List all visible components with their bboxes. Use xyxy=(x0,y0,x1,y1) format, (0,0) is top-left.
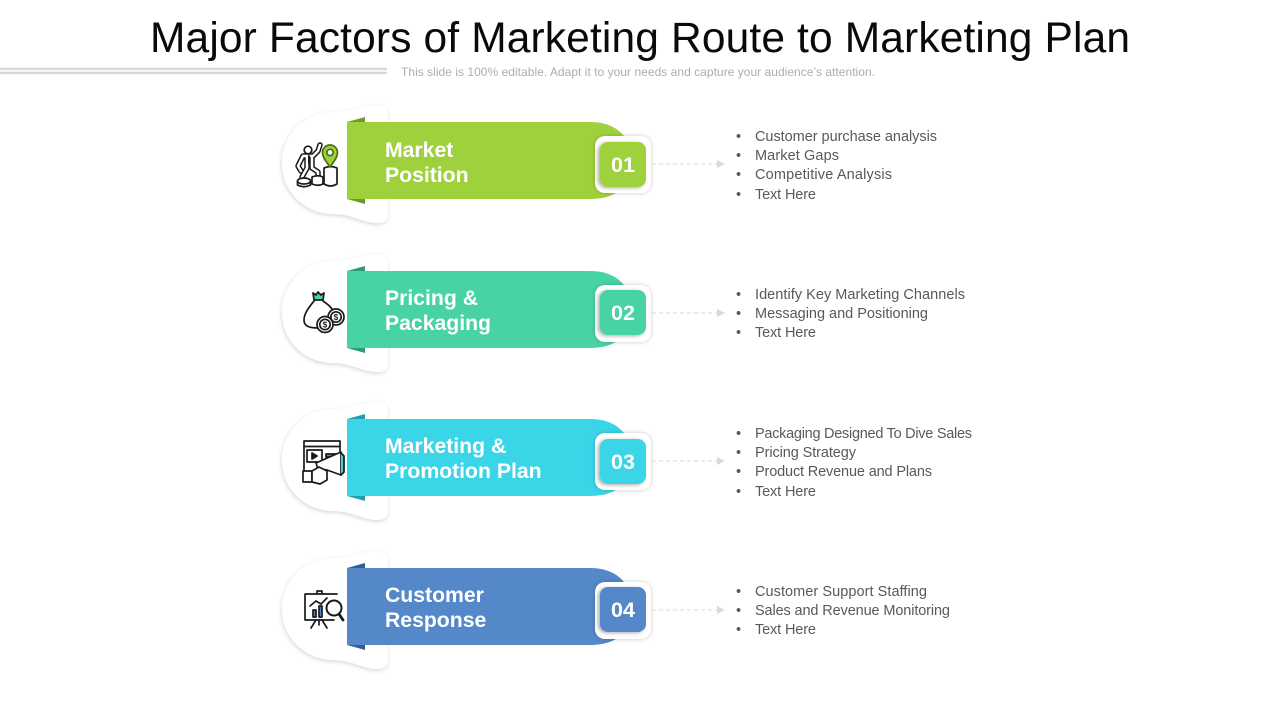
ribbon fold bottom xyxy=(347,496,365,501)
coin dollar signs: $ xyxy=(334,313,339,322)
icon holder card xyxy=(282,254,388,372)
panel: row 2 pricing and packaging xyxy=(282,254,965,372)
bullet list: • xyxy=(736,325,741,341)
icon holder card xyxy=(282,105,388,223)
bullet list: Customer purchase analysis xyxy=(755,129,937,145)
ribbon fold top xyxy=(347,563,365,568)
banner label: Pricing & xyxy=(385,287,478,310)
coin dollar signs xyxy=(323,313,339,330)
subtitle: This slide is 100% editable. Adapt it to your needs and capture your audience’s attention. xyxy=(401,65,875,79)
bullet list: • xyxy=(736,584,741,600)
bullet list: • xyxy=(736,426,741,442)
bullet list: Identify Key Marketing Channels xyxy=(755,287,965,303)
bullet list: Text Here xyxy=(755,325,816,341)
icon: presentation board with magnifier xyxy=(305,591,343,628)
panel: row 4 customer response xyxy=(282,551,950,669)
ribbon fold top xyxy=(347,266,365,271)
banner label: Marketing & xyxy=(385,435,506,458)
banner label: Position xyxy=(385,164,469,187)
bullet list: • xyxy=(736,484,741,500)
bullet list: • xyxy=(736,603,741,619)
arrow xyxy=(652,160,725,168)
banner label: Promotion Plan xyxy=(385,460,542,483)
bullet list: Sales and Revenue Monitoring xyxy=(755,603,950,619)
number badge: 02 xyxy=(611,301,635,325)
panel: row 1 market position xyxy=(282,105,937,223)
number badge xyxy=(595,136,651,193)
bullet list: • xyxy=(736,148,741,164)
bullet list: Messaging and Positioning xyxy=(755,306,928,322)
bullet list: Packaging Designed To Dive Sales xyxy=(755,426,972,442)
bullet list: Market Gaps xyxy=(755,148,839,164)
bullet list: • xyxy=(736,445,741,461)
bullet list: Text Here xyxy=(755,187,816,203)
bullet list: Product Revenue and Plans xyxy=(755,464,932,480)
icon: money bag and coins xyxy=(304,292,344,332)
banner xyxy=(347,568,630,645)
coin dollar signs: $ xyxy=(323,320,328,330)
ribbon fold bottom xyxy=(347,348,365,353)
bullet list: • xyxy=(736,129,741,145)
ribbon fold bottom xyxy=(347,645,365,650)
bullet list: Pricing Strategy xyxy=(755,445,857,461)
banner label: Packaging xyxy=(385,312,491,335)
ribbon fold top xyxy=(347,117,365,122)
icon holder card xyxy=(282,551,388,669)
arrow xyxy=(652,457,725,465)
banner label: Market xyxy=(385,139,453,162)
number badge: 01 xyxy=(611,153,635,177)
number badge xyxy=(595,582,651,639)
panel: row 3 marketing and promotion plan xyxy=(282,402,972,520)
ribbon fold top xyxy=(347,414,365,419)
title: Major Factors of Marketing Route to Marketing Plan xyxy=(150,15,1130,62)
bullet list xyxy=(736,129,937,203)
bullet list: Text Here xyxy=(755,484,816,500)
banner xyxy=(347,271,630,348)
bullet list: • xyxy=(736,167,741,183)
number badge: 03 xyxy=(611,450,635,474)
banner label: Customer xyxy=(385,584,484,607)
icon: browser with megaphone xyxy=(303,441,344,484)
bullet list: • xyxy=(736,187,741,203)
ribbon fold bottom xyxy=(347,199,365,204)
bullet list: Competitive Analysis xyxy=(755,167,892,183)
arrow xyxy=(652,309,725,317)
bullet list: Customer Support Staffing xyxy=(755,584,927,600)
icon: person climbing to location pin xyxy=(298,145,338,187)
title underline xyxy=(0,68,387,74)
number badge xyxy=(595,433,651,490)
bullet list xyxy=(736,584,950,638)
number badge xyxy=(595,285,651,342)
icon holder card xyxy=(282,402,388,520)
bullet list: • xyxy=(736,287,741,303)
bullet list xyxy=(736,426,972,500)
bullet list: • xyxy=(736,622,741,638)
banner xyxy=(347,122,630,199)
bullet list: • xyxy=(736,464,741,480)
arrow xyxy=(652,606,725,614)
banner label: Response xyxy=(385,609,486,632)
bullet list xyxy=(736,287,965,341)
banner xyxy=(347,419,630,496)
bullet list: • xyxy=(736,306,741,322)
bullet list: Text Here xyxy=(755,622,816,638)
number badge: 04 xyxy=(611,598,635,622)
